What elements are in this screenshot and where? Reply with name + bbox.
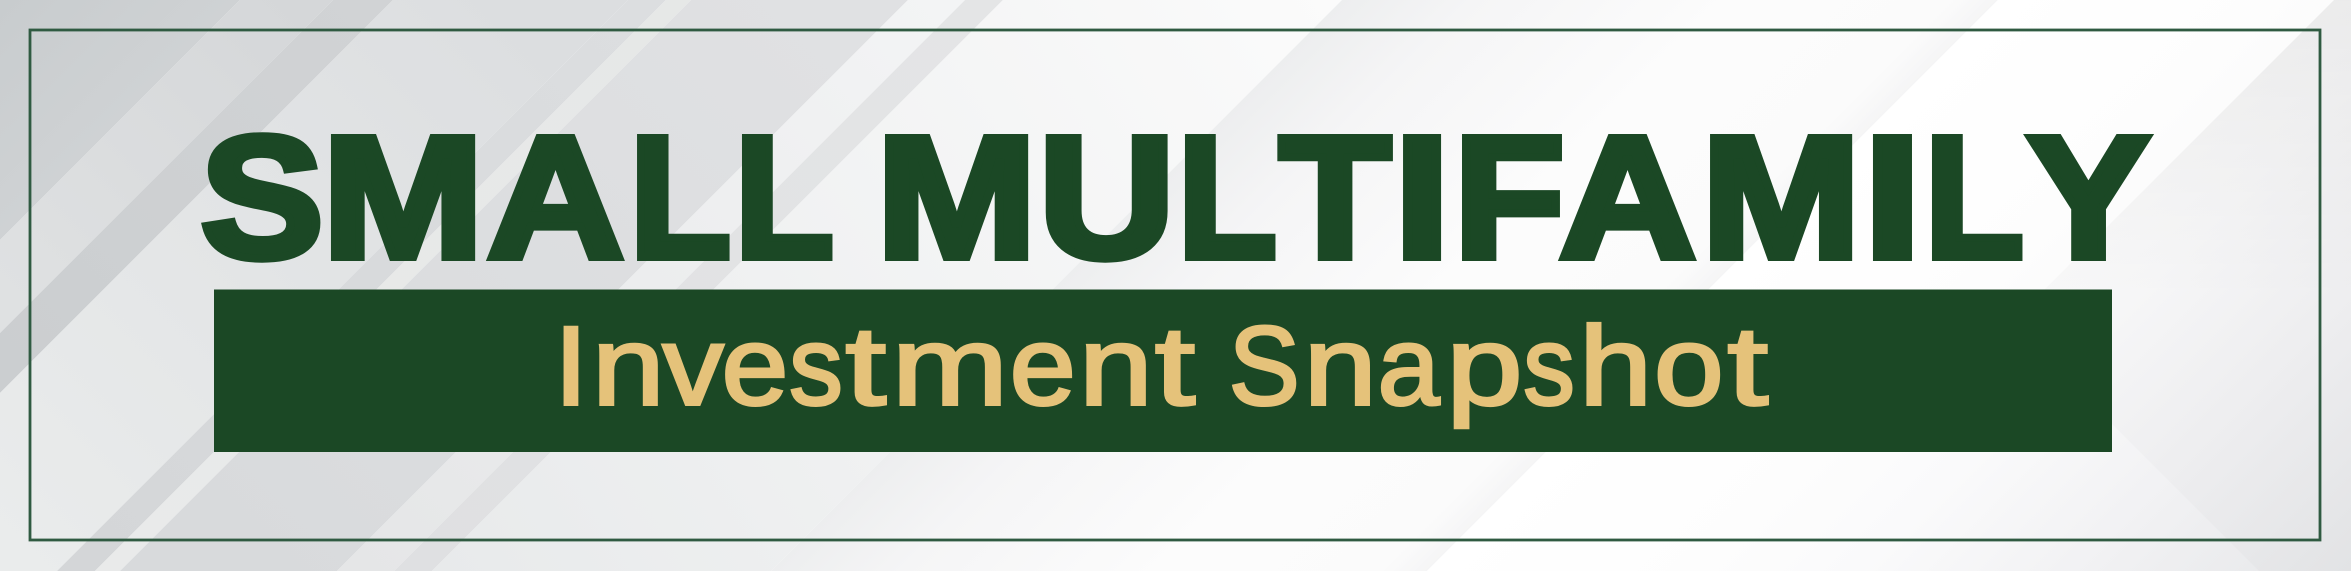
subtitle: Investment Snapshot: e	[1010, 305, 1076, 429]
subtitle banner	[214, 290, 2112, 452]
title: SMALL MULTIFAMILY: S	[201, 101, 323, 294]
title: SMALL MULTIFAMILY: L	[1925, 101, 2024, 294]
subtitle: Investment Snapshot: p	[1446, 303, 1523, 429]
subtitle: Investment Snapshot: I	[554, 304, 588, 428]
subtitle: Investment Snapshot: S	[1229, 304, 1300, 429]
title: SMALL MULTIFAMILY: L	[630, 101, 731, 294]
subtitle: Investment Snapshot: n	[1079, 303, 1153, 428]
title: SMALL MULTIFAMILY: Y	[2027, 101, 2150, 294]
subtitle: Investment Snapshot: s	[1523, 304, 1575, 428]
title: SMALL MULTIFAMILY: L	[1178, 101, 1277, 294]
title: SMALL MULTIFAMILY: M	[877, 101, 1037, 294]
subtitle: Investment Snapshot: h	[1579, 303, 1652, 428]
subtitle: Investment Snapshot	[554, 303, 1768, 429]
subtitle: Investment Snapshot: a	[1378, 303, 1440, 429]
title: SMALL MULTIFAMILY: T	[1280, 100, 1391, 294]
subtitle: Investment Snapshot: n	[592, 303, 665, 428]
title: SMALL MULTIFAMILY: L	[735, 101, 834, 294]
subtitle: Investment Snapshot: m	[892, 303, 1008, 428]
title: SMALL MULTIFAMILY	[201, 100, 2150, 294]
subtitle: Investment Snapshot: n	[1304, 303, 1377, 428]
subtitle: Investment Snapshot: s	[789, 305, 843, 429]
title: SMALL MULTIFAMILY: F	[1454, 101, 1564, 294]
title: SMALL MULTIFAMILY: I	[1394, 101, 1450, 294]
subtitle: Investment Snapshot: t	[1155, 304, 1195, 429]
subtitle: Investment Snapshot: o	[1654, 304, 1724, 429]
title: SMALL MULTIFAMILY: A	[1559, 101, 1696, 294]
title: SMALL MULTIFAMILY: I	[1864, 101, 1921, 294]
subtitle: Investment Snapshot: t	[845, 303, 886, 429]
subtitle: Investment Snapshot: t	[1727, 303, 1768, 429]
subtitle: Investment Snapshot: e	[722, 303, 788, 429]
title: SMALL MULTIFAMILY: M	[1702, 100, 1860, 294]
title: SMALL MULTIFAMILY: M	[322, 100, 484, 294]
title: SMALL MULTIFAMILY: A	[487, 101, 624, 294]
banner background	[214, 290, 2112, 452]
subtitle: Investment Snapshot: v	[662, 303, 724, 428]
title: SMALL MULTIFAMILY: U	[1039, 101, 1175, 294]
